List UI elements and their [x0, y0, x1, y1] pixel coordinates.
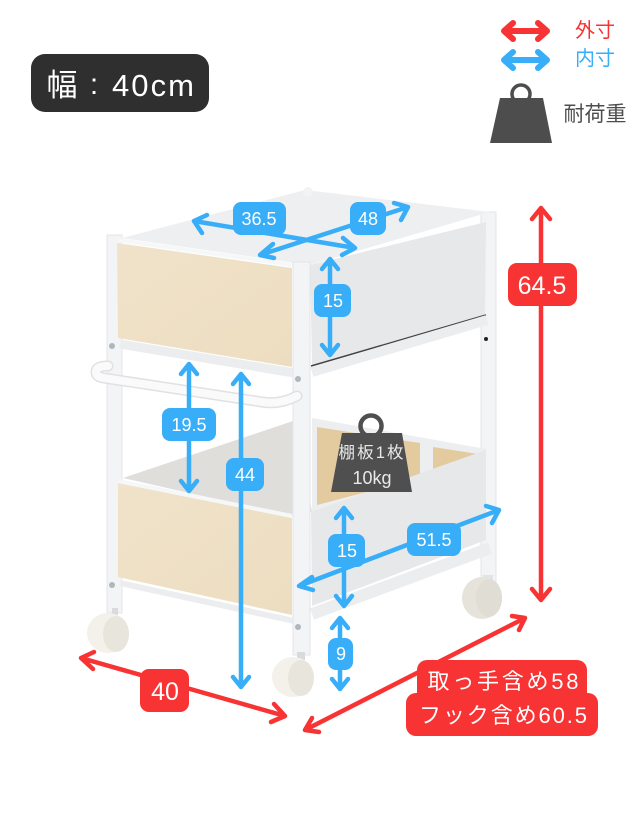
dimension: depth arrow [305, 616, 525, 732]
width badge: 40cm [112, 68, 194, 103]
lower side panel [311, 450, 486, 606]
dimension: 48 [260, 202, 408, 258]
dimension: 36.5 [194, 202, 355, 255]
load label weight: 棚板1枚 10kg: 10kg [352, 468, 392, 488]
dimension: 51.5: 51.5 [416, 530, 452, 550]
bottom wood front [118, 483, 292, 615]
handle [96, 366, 297, 403]
legend: outer dimension [504, 19, 615, 42]
dimension: 40 [81, 652, 285, 722]
legend: inner dimension: 内寸 [575, 47, 615, 70]
lower rail right [312, 548, 490, 614]
dimension: 19.5 [162, 364, 216, 491]
lower back wood [317, 427, 420, 505]
legend: load capacity label: 耐荷重 [564, 103, 626, 126]
front middle caster [272, 652, 314, 697]
dimension: 15 lower [328, 508, 365, 606]
lower shelf interior [123, 420, 312, 516]
dimension: 48: 48 [358, 209, 378, 229]
dimension: 15 upper [314, 259, 351, 355]
lower back frame [312, 418, 486, 515]
dimension: 19.5: 19.5 [171, 415, 207, 435]
back right small hole [484, 337, 488, 341]
back right post [481, 212, 496, 584]
top panel [122, 190, 490, 265]
dimension: 9: 9 [336, 644, 346, 664]
top rail right [312, 320, 487, 372]
dimension: 36.5: 36.5 [241, 209, 277, 229]
dimension: 64.5 [508, 208, 577, 600]
dimension: 15 lower: 15 [337, 541, 357, 561]
dimension: 9 [328, 618, 353, 689]
back right caster [462, 575, 502, 619]
dimension: 40: 40 [151, 678, 179, 706]
screws [109, 343, 301, 630]
depth label: 取っ手含め58 [428, 669, 578, 694]
load label weight: 棚板1枚 10kg [331, 416, 412, 492]
legend: load capacity weight icon [490, 85, 552, 143]
width badge: 幅 [46, 68, 78, 103]
top drawer wood front [117, 243, 292, 367]
dimension: 64.5: 64.5 [518, 272, 566, 300]
width badge: : [90, 68, 98, 101]
legend: inner dimension [504, 47, 615, 70]
dimension: 51.5 [299, 506, 499, 590]
front left post [107, 235, 122, 613]
width badge [31, 54, 209, 112]
depth label [406, 660, 598, 736]
dimension: 15 upper: 15 [323, 291, 343, 311]
top front rail [120, 344, 294, 373]
front middle post [293, 262, 310, 655]
legend: outer dimension: 外寸 [575, 19, 615, 42]
load label weight: 棚板1枚 10kg: 棚板1枚 [338, 443, 404, 462]
bottom front rail [120, 583, 294, 621]
front left caster [87, 608, 129, 653]
top drawer side panel [310, 222, 486, 365]
depth label: フック含め60.5 [419, 703, 587, 728]
dimension: 44 [226, 374, 264, 687]
cart illustration [87, 187, 502, 697]
dimension: 44: 44 [235, 465, 255, 485]
